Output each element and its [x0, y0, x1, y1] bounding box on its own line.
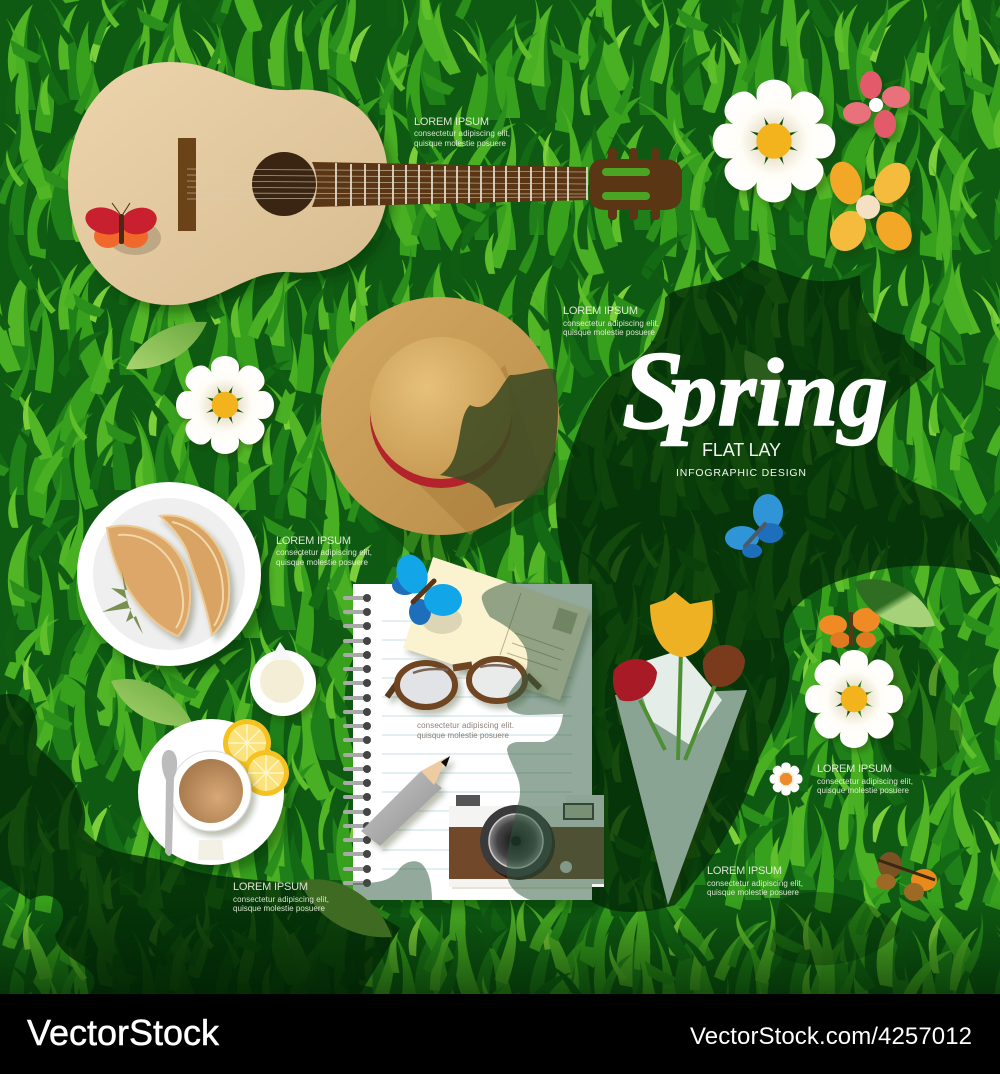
red tulip [613, 659, 657, 701]
postcard [403, 557, 590, 700]
hat brim [321, 297, 559, 535]
pencil [361, 756, 450, 846]
tree shadow patches, lower right [770, 635, 963, 965]
hat band [370, 346, 512, 488]
sound hole [252, 152, 588, 216]
leaf: behind title [744, 350, 787, 403]
leaf: near guitar [126, 322, 207, 369]
label: flowers: consectetur adipiscing elit, [817, 777, 913, 786]
paper cone [615, 690, 747, 905]
brown tulip [703, 645, 745, 687]
flower: large white daisy [713, 80, 835, 202]
lemon slices [223, 719, 289, 796]
flower: pink [843, 71, 910, 138]
stems and leaves [640, 650, 715, 760]
camera body [449, 795, 604, 887]
hat long shadow [360, 370, 560, 575]
leaf: bottom of notebook [300, 879, 392, 937]
leaf: left [111, 679, 193, 726]
label: guitar: consectetur adipiscing elit, [414, 129, 510, 138]
headstock [589, 148, 682, 220]
label: flowers: LOREM IPSUM [817, 763, 892, 775]
leaf: right [854, 579, 935, 627]
flower: orange [823, 156, 919, 258]
leaf shadow on hat [440, 369, 558, 508]
label: tea: consectetur adipiscing elit, [233, 895, 329, 904]
label: hat: consectetur adipiscing elit, [563, 319, 659, 328]
watermark url: VectorStock.com/4257012 [690, 1023, 972, 1050]
subtitle: infographic design: INFOGRAPHIC DESIGN [676, 467, 806, 479]
shadow over notebook corner [353, 861, 432, 900]
bridge [178, 138, 196, 231]
tree shadow on grass, lower left [0, 694, 400, 994]
label: guitar: quisque molestie posuere [414, 139, 507, 148]
label: flowers: quisque molestie posuere [817, 786, 910, 795]
milk jug [250, 642, 316, 716]
title: Spring: S [622, 329, 684, 453]
tree shadow on grass, upper right [556, 260, 1000, 912]
white wrap [633, 650, 722, 745]
butterfly: blue right [725, 494, 783, 558]
spoon [162, 750, 177, 856]
herb sprig [102, 572, 143, 634]
butterfly: red [82, 203, 161, 255]
camera leather band [449, 827, 604, 879]
viewfinder [564, 804, 593, 819]
label: pastries: LOREM IPSUM [276, 535, 351, 547]
label: pastries: quisque molestie posuere [276, 558, 369, 567]
pastries [107, 515, 229, 636]
headstock slots [602, 168, 650, 200]
label: bouquet: consectetur adipiscing elit, [707, 879, 803, 888]
watermark band [0, 994, 1000, 1074]
crown long shadow on brim [390, 365, 545, 535]
butterfly: orange [819, 608, 880, 648]
hat crown [370, 337, 512, 479]
label: tea [233, 881, 329, 913]
butterfly: brown [876, 852, 937, 901]
page [353, 584, 592, 900]
plate [77, 482, 261, 666]
camera back plate [452, 885, 592, 889]
page note text: consectetur adipiscing elit. [417, 721, 514, 730]
notebook [343, 550, 604, 900]
label: bouquet [707, 865, 803, 897]
label: flowers [817, 763, 913, 795]
spiral binding [343, 594, 371, 887]
tulip bouquet [613, 592, 747, 905]
tea set [138, 719, 289, 865]
subtitle: flat lay: FLAT LAY [702, 440, 781, 460]
label: guitar: LOREM IPSUM [414, 116, 489, 128]
flower: small white [769, 762, 803, 796]
watermark logo: VectorStock [27, 1012, 220, 1053]
label: hat: quisque molestie posuere [563, 328, 656, 337]
flower: right white daisy [805, 650, 903, 748]
saucer [138, 719, 284, 865]
label: pastries [276, 535, 372, 567]
label: hat [563, 305, 659, 337]
title: Spring [622, 329, 888, 453]
yellow tulip [650, 592, 713, 657]
plate with pastries [77, 482, 261, 666]
shadow over notebook [482, 582, 604, 900]
tea bag [198, 840, 224, 860]
label: pastries: consectetur adipiscing elit, [276, 548, 372, 557]
label: tea: LOREM IPSUM [233, 881, 308, 893]
page note text: quisque molestie posuere [417, 731, 510, 740]
glasses [387, 659, 540, 707]
label: bouquet: LOREM IPSUM [707, 865, 782, 877]
strings [187, 169, 588, 199]
straw hat [321, 297, 560, 575]
camera [449, 795, 604, 889]
shutter grip [456, 795, 480, 806]
tea cup [171, 751, 251, 831]
flower: left white daisy [176, 356, 274, 454]
guitar [68, 62, 682, 305]
page note text [417, 721, 514, 740]
ruled lines [382, 621, 572, 869]
guitar body [68, 62, 388, 305]
label: guitar [414, 116, 510, 148]
label: tea: quisque molestie posuere [233, 904, 326, 913]
label: hat: LOREM IPSUM [563, 305, 638, 317]
lens [480, 805, 555, 880]
title: Spring: pring [661, 339, 888, 446]
bottom grass fade [0, 900, 1000, 994]
frets [336, 163, 587, 206]
butterfly: blue on notebook [391, 550, 462, 634]
label: bouquet: quisque molestie posuere [707, 888, 800, 897]
